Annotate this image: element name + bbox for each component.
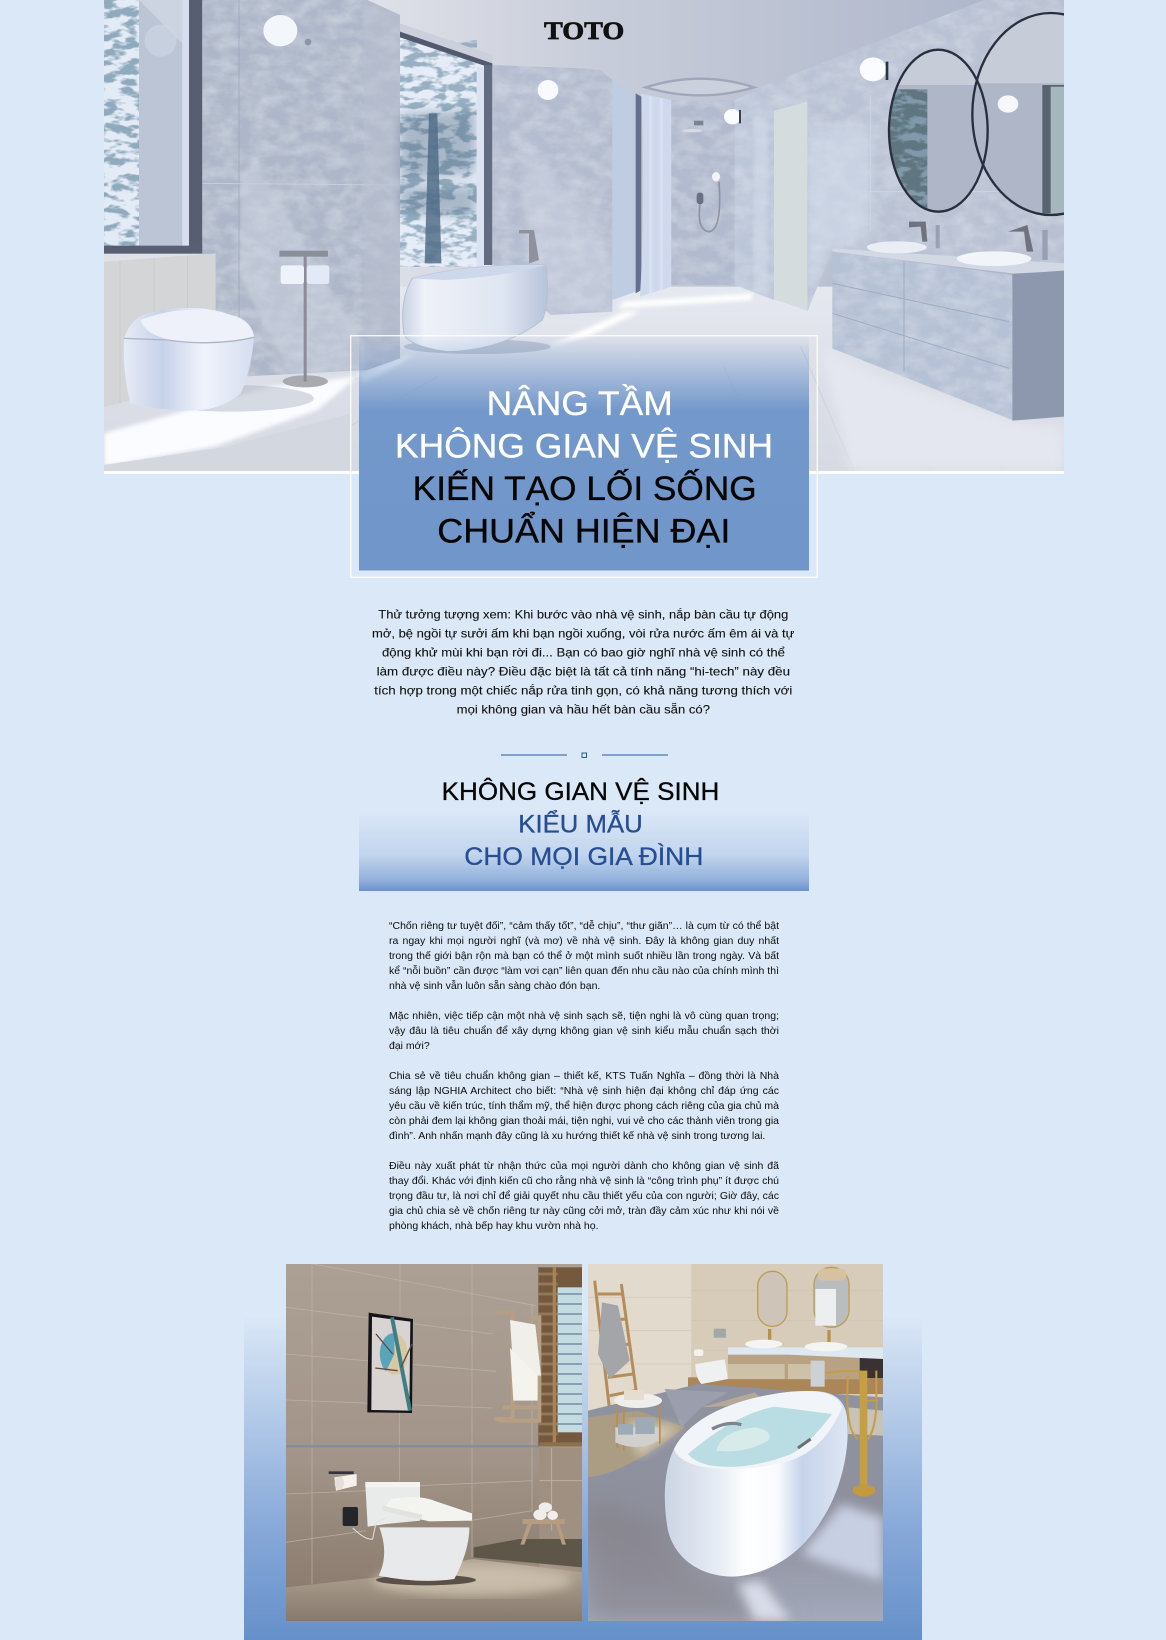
towel ladder: [595, 1281, 636, 1411]
body paragraph 1: trong thế giới bận rộn mà bạn có thể ở một mình suốt nhiều lần trong ngày. Và bất: [389, 950, 779, 962]
section heading text: CHO MỌI GIA ĐÌNH: [464, 842, 703, 871]
freestanding bathtub: [665, 1391, 848, 1577]
body paragraph 2: [389, 1010, 779, 1052]
main concrete wall: [202, 0, 400, 377]
intro paragraph: mở, bệ ngồi tự sưởi ấm khi bạn ngồi xuống, vòi rửa nước ấm êm ái và tự: [372, 626, 794, 640]
bottom gradient panel: [244, 1315, 922, 1640]
towel rack: [494, 1312, 541, 1421]
body paragraph 2: đại mới?: [389, 1040, 430, 1052]
photo: toilet with washlet: [286, 1264, 582, 1621]
body paragraph 4: thay đổi. Khác với định kiến cũ cho rằng nhà vệ sinh là “công trình phụ” ít được chú: [389, 1175, 779, 1187]
body paragraph 1: ra ngay khi mọi người nghĩ (và mơ) về nhà vệ sinh. Đây là không gian duy nhất: [389, 935, 779, 947]
wall-hung toilet: [694, 1349, 728, 1384]
wall lamp left: [263, 15, 311, 46]
intro paragraph: tích hợp trong một chiếc nắp rửa tinh gọn, có khả năng tương thích với: [374, 682, 792, 697]
floor-standing paper holder: [279, 251, 329, 387]
body paragraph 3: [389, 1070, 779, 1142]
photo: bathtub with gold faucet: [588, 1264, 883, 1621]
divider ornament: [501, 753, 668, 758]
louvered window: [538, 1267, 582, 1588]
step and stool with towels: [474, 1502, 582, 1567]
title text: CHUẨN HIỆN ĐẠI: [437, 513, 730, 551]
intro paragraph: mọi không gian và hầu hết bàn cầu sẵn có?: [457, 701, 710, 716]
body paragraph 3: yêu cầu về kiến trúc, tính thẩm mỹ, thể hiện được phong cách riêng của gia chủ mà: [389, 1100, 779, 1112]
title frame: [351, 336, 817, 577]
floor: [104, 287, 1064, 471]
side table with basket: [614, 1390, 662, 1451]
title text: [395, 385, 773, 551]
gold floor faucet: [825, 1371, 878, 1497]
title text: KHÔNG GIAN VỆ SINH: [395, 427, 773, 465]
section heading text: KIỂU MẪU: [518, 808, 643, 838]
intro paragraph: làm được điều này? Điều đặc biệt là tất cả tính năng “hi-tech” này đều: [377, 664, 790, 678]
body paragraph 4: phòng khách, nhà bếp hay khu vườn nhà họ.: [389, 1220, 598, 1232]
wall lamp right: [860, 57, 888, 81]
round mirrors: [888, 12, 1064, 216]
toilet with washlet seat: [353, 1482, 476, 1585]
doorway: [774, 102, 807, 311]
title text: NÂNG TẦM: [487, 385, 673, 423]
travertine walls: [588, 1264, 883, 1411]
floating vanity with basins: [688, 1329, 883, 1394]
right concrete wall: [754, 0, 1064, 312]
section heading text: KHÔNG GIAN VỆ SINH: [442, 777, 719, 806]
concrete floor: [588, 1384, 883, 1621]
body paragraph 2: Mặc nhiên, việc tiếp cận một nhà vệ sinh sạch sẽ, tiện nghi là vô cùng quan trọng;: [389, 1010, 779, 1022]
intro paragraph: động khử mùi khi bạn rời đi... Bạn có bao giờ nghĩ nhà vệ sinh có thể: [382, 645, 785, 659]
third window and curtain: [612, 80, 671, 300]
intro paragraph: Thử tưởng tượng xem: Khi bước vào nhà vệ sinh, nắp bàn cầu tự động: [378, 606, 788, 621]
body paragraph 3: đình”. Anh nhấn mạnh đây cũng là xu hướng thiết kế nhà vệ sinh trong tương lai.: [389, 1130, 765, 1142]
body paragraph 3: còn phải đem lại không gian thoải mái, tiện nghi, vui vẻ cho các thành viên trong gia: [389, 1115, 779, 1127]
title panel: [350, 335, 818, 578]
body paragraph 1: “Chốn riêng tư tuyệt đối”, “cảm thấy tốt”, “dễ chịu”, “thư giãn”… là cụm từ có thể bật: [389, 920, 779, 932]
section heading text: [442, 777, 719, 871]
body paragraph 3: Chia sẻ về tiêu chuẩn không gian – thiết kế, KTS Tuấn Nghĩa – đồng thời là Nhà: [389, 1070, 779, 1082]
second concrete wall: [492, 65, 612, 315]
body paragraph 4: gia chủ chia sẻ về chốn riêng tư này cũng cởi mở, tràn đầy cảm xúc như khi nói về: [389, 1205, 779, 1217]
tiled wall: [286, 1264, 582, 1621]
body paragraph 4: Điều này xuất phát từ nhận thức của mọi người dành cho không gian vệ sinh đã: [389, 1160, 779, 1172]
smart toilet: [124, 308, 314, 412]
tile floor: [286, 1559, 582, 1621]
shower niche: [646, 79, 774, 300]
body paragraph 2: vậy đâu là tiêu chuẩn để xây dựng không gian vệ sinh kiểu mẫu chuẩn sạch thời: [389, 1025, 779, 1037]
framed tree painting: [367, 1313, 413, 1413]
body paragraph 1: nhà vệ sinh vẫn luôn sẵn sàng chào đón bạn.: [389, 980, 600, 992]
title text: KIẾN TẠO LỐI SỐNG: [413, 469, 757, 508]
intro paragraph: [372, 606, 794, 716]
body paragraph 1: kể “nỗi buồn” cần được “làm vơi cạn” liên quan đến nhu cầu nào của chính mình thì: [389, 965, 779, 977]
section gradient band: [359, 810, 809, 891]
ceiling: [104, 0, 1064, 471]
hero photo: modern bathroom: [104, 0, 1064, 474]
body paragraph 1: [389, 920, 779, 992]
oval mirrors: [758, 1267, 849, 1327]
left window with trees: [104, 0, 202, 254]
toilet paper holder: [329, 1471, 358, 1526]
freestanding bathtub with faucet: [403, 230, 551, 354]
second window with tall tree: [400, 23, 492, 267]
body paragraph 3: sáng lập NGHIA Architect cho biết: “Nhà vệ sinh hiện đại không chỉ đáp ứng các: [389, 1085, 779, 1097]
section heading panel: [359, 752, 809, 891]
TOTO logo: TOTO: [544, 17, 624, 45]
body paragraph 4: [389, 1160, 779, 1232]
wood wainscot panel: [104, 253, 216, 407]
vanity unit with basins: [832, 222, 1064, 421]
title background box: [359, 335, 809, 570]
body paragraph 4: trọng đầu tư, là nơi chỉ để giải quyết nhu cầu thiết yếu của con người; Giờ đây, các: [389, 1190, 779, 1202]
